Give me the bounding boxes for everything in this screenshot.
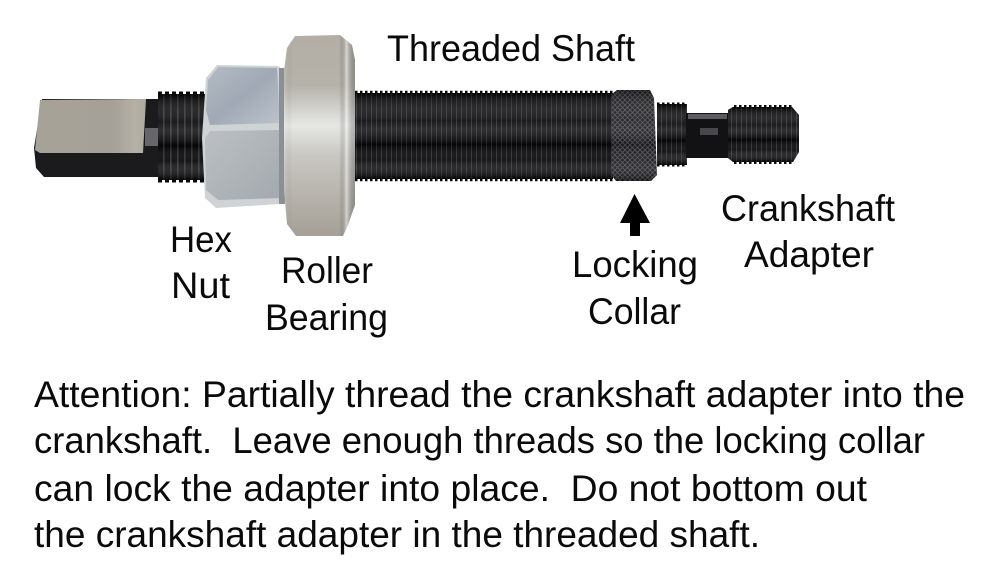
attention note: Attention: Partially thread the crankshaft adapter into the [34, 374, 965, 415]
label: Crankshaft Adapter [721, 188, 896, 275]
attention note: can lock the adapter into place. Do not bottom out [34, 468, 868, 509]
attention note [34, 374, 965, 555]
locking collar [612, 90, 657, 181]
label: Threaded Shaft: Threaded Shaft [387, 28, 636, 69]
threaded shaft [350, 92, 613, 180]
attention note: crankshaft. Leave enough threads so the locking collar [34, 420, 925, 461]
tool photo: threaded shaft assembly [34, 35, 799, 236]
label: Roller Bearing: Bearing [265, 297, 388, 338]
attention note: the crankshaft adapter in the threaded shaft. [34, 514, 760, 555]
label: Roller Bearing: Roller [281, 250, 373, 291]
square drive end [34, 99, 160, 177]
label: Locking Collar: Collar [588, 291, 681, 332]
label: Hex Nut: Nut [171, 265, 231, 306]
label: Locking Collar: Locking [572, 244, 698, 285]
label: Hex Nut: Hex [170, 219, 232, 260]
adapter neck [686, 113, 729, 158]
adapter threads [657, 104, 687, 166]
label: Crankshaft Adapter: Crankshaft [721, 188, 896, 229]
roller bearing [284, 35, 355, 236]
rear thread section [158, 93, 205, 181]
arrow: to locking collar [620, 194, 650, 236]
label: Crankshaft Adapter: Adapter [744, 234, 874, 275]
label: Hex Nut [170, 219, 232, 306]
label: Roller Bearing [265, 250, 388, 338]
adapter end threads [728, 106, 799, 163]
label: Locking Collar [572, 244, 698, 332]
hex nut [202, 65, 285, 208]
